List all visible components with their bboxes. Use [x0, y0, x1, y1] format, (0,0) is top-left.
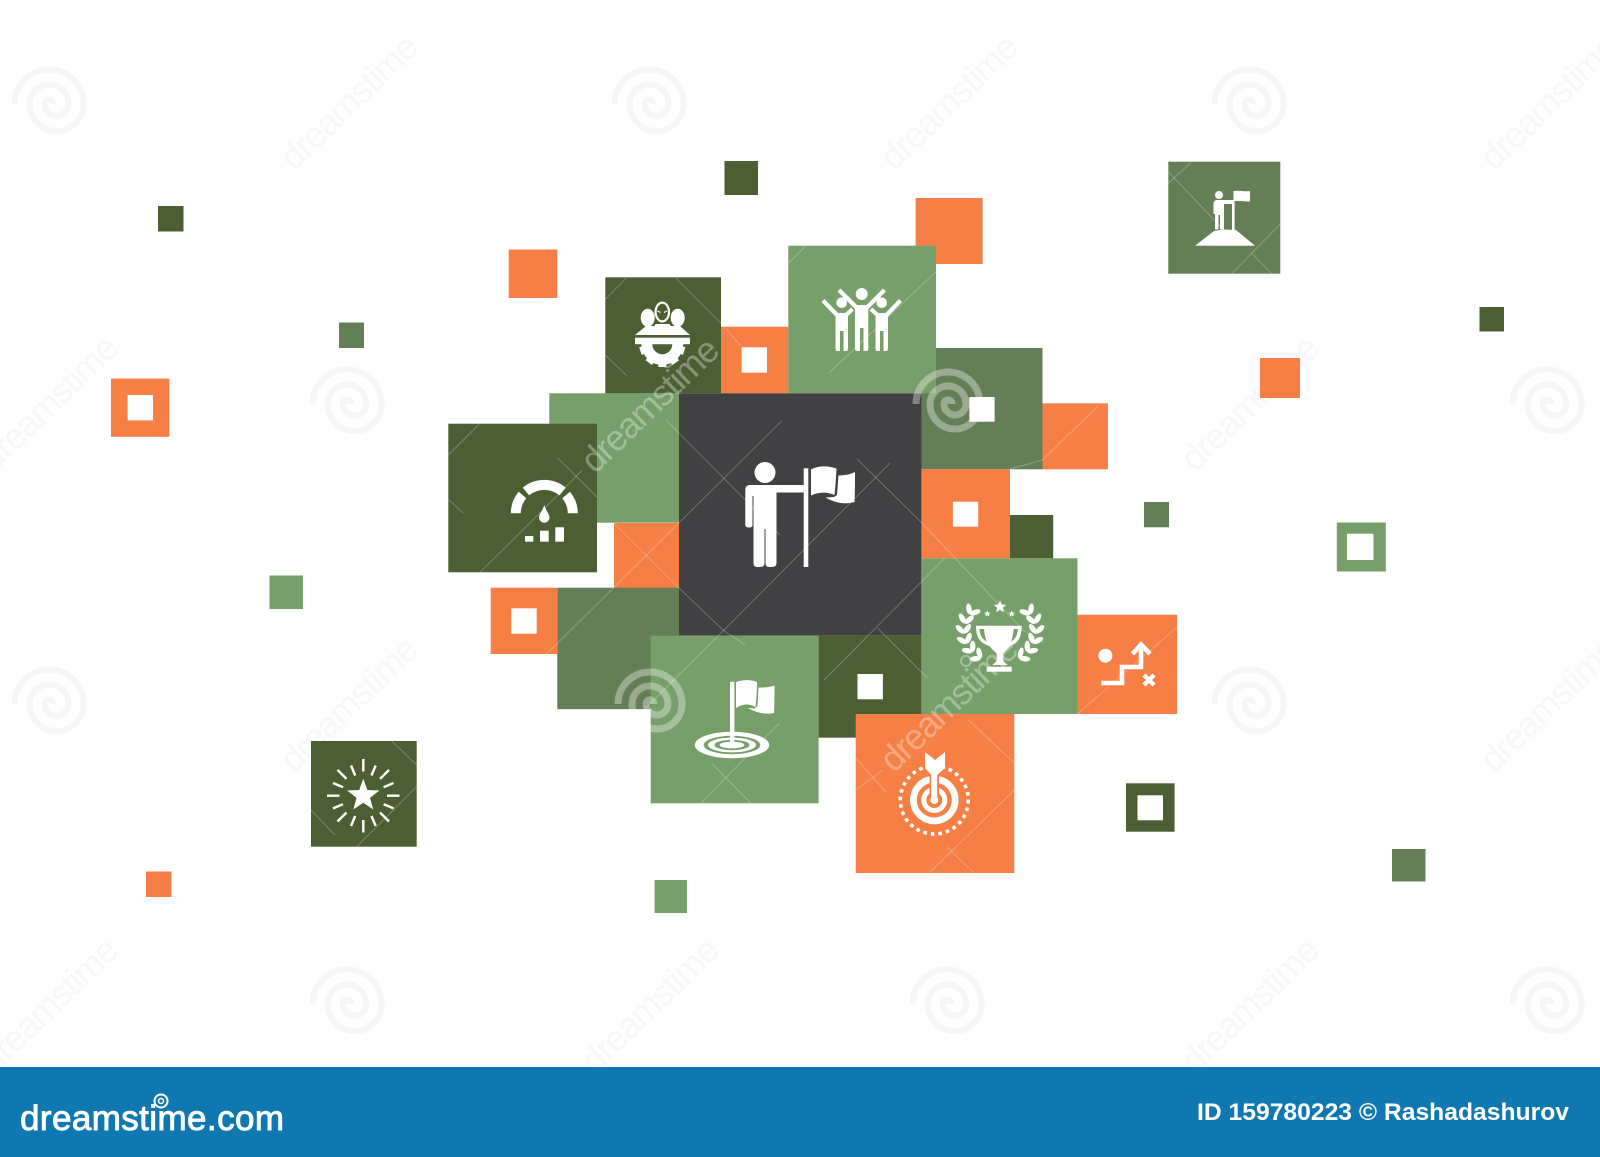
- watermark layer on white: dreamstime: [1172, 929, 1327, 1081]
- icon: celebrating team: [823, 288, 900, 351]
- icon: flag on target: [695, 680, 774, 758]
- hollow square: light green right: [1337, 522, 1386, 572]
- panel: trophy: [921, 558, 1078, 714]
- footer logo: dreamstime.com: [20, 1099, 284, 1138]
- panel: gear team: [605, 277, 721, 393]
- scattered small squares: [146, 161, 1504, 913]
- icon: steps with arrow: [1098, 644, 1154, 685]
- watermark layer on white: dreamstime: [1172, 327, 1327, 479]
- panel cluster backing squares: [491, 198, 1108, 738]
- icon: star with rays: [327, 759, 400, 832]
- panel: flag on target: [651, 636, 819, 803]
- icon: person holding flag: [745, 462, 855, 567]
- panel: dart target: [856, 714, 1014, 873]
- watermark lines and marks over panels: [311, 163, 1280, 873]
- panel: gauge: [448, 424, 597, 572]
- watermark layer on white: dreamstime: [271, 26, 426, 178]
- footer credit: ID 159780223 © Rashadashurov: [1197, 1099, 1570, 1126]
- panel: star: [311, 741, 417, 847]
- panel: steps: [1078, 615, 1177, 714]
- watermark layer on white: dreamstime: [271, 628, 426, 780]
- panel: mountain summit: [1168, 162, 1280, 274]
- hollow square: dark green right: [1126, 783, 1175, 832]
- panel: center leader: [679, 393, 921, 636]
- footer bar: [0, 1067, 1600, 1157]
- watermark layer on white: dreamstime: [572, 929, 727, 1081]
- icon: trophy with laurel: [954, 600, 1046, 672]
- icon: team on gear: [635, 302, 690, 367]
- watermark lines and marks over panels: dreamstime: [871, 628, 1026, 780]
- panel: celebrating team: [788, 246, 936, 393]
- icon: dart in target: [900, 752, 968, 834]
- icon: gauge with bars: [516, 485, 573, 542]
- icon: person with flag on summit: [1195, 191, 1255, 246]
- watermark layer on white: dreamstime: [871, 26, 1026, 178]
- watermark lines and marks over panels: dreamstime: [572, 329, 727, 481]
- hollow square: orange left: [111, 379, 169, 437]
